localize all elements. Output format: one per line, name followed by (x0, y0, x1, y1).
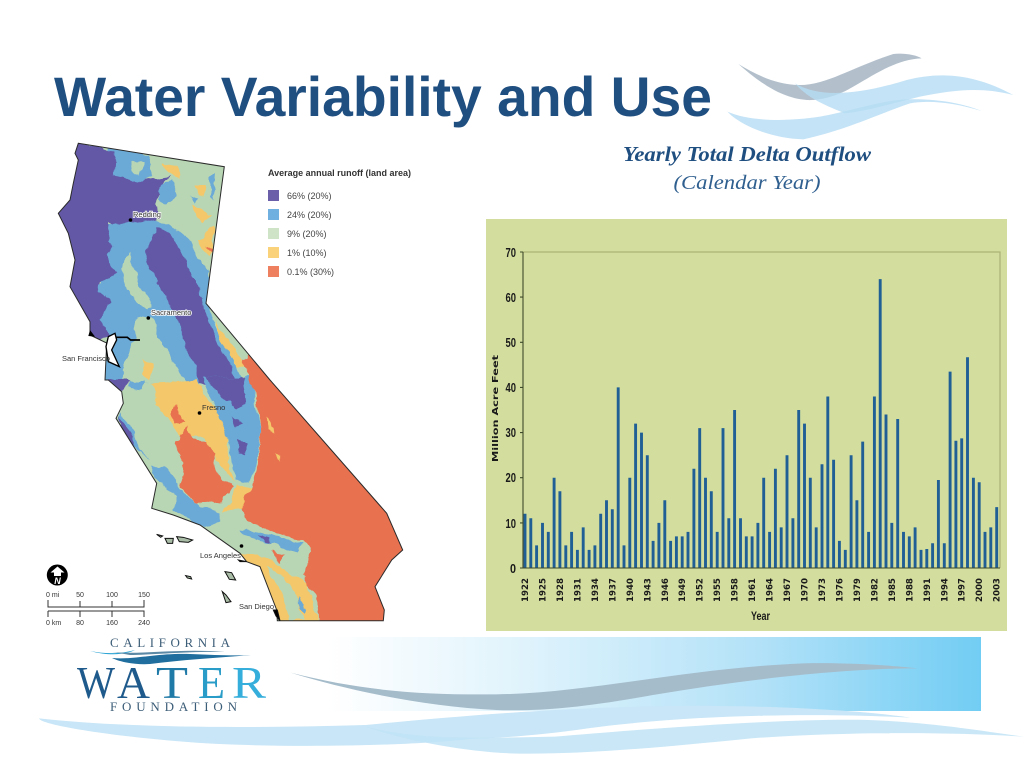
logo waves (90, 650, 251, 664)
x axis year labels: 1973 (818, 578, 828, 602)
city: Sacramento (146, 308, 191, 320)
legend item: 0.1%: 0.1% (30%) (287, 267, 334, 277)
y axis labels: 40 (506, 380, 516, 395)
valley yellow (152, 380, 235, 483)
icon: north arrow (47, 564, 68, 586)
legend item: 24% (268, 209, 332, 220)
x axis year labels: 1931 (573, 578, 583, 602)
x axis year labels: 1979 (853, 578, 863, 602)
y axis labels: 10 (506, 516, 516, 531)
map: California average annual runoff (58, 142, 404, 622)
logo wordmark bottom: FOUNDATION (110, 699, 238, 714)
x axis title: Year (751, 609, 770, 623)
x axis year labels: 1991 (923, 578, 933, 602)
city: San Diego: San Diego (239, 602, 274, 611)
x axis year labels: 1961 (748, 578, 758, 602)
legend item: 0.1% (268, 266, 334, 277)
south coast purple and blue (103, 380, 128, 390)
city: Redding (129, 210, 161, 222)
y axis title: Million Acre Feet (491, 355, 500, 462)
eastern strip (217, 322, 247, 367)
city: Sacramento: Sacramento (151, 308, 191, 317)
x axis year labels: 1952 (696, 578, 706, 602)
city: Los Angeles: Los Angeles (200, 551, 241, 560)
legend item: 1% (268, 247, 327, 258)
x axis year labels: 1982 (870, 578, 880, 602)
desert red (240, 355, 410, 623)
scale bar (46, 592, 150, 627)
x axis year labels: 1970 (800, 578, 810, 602)
panel: bar chart of yearly delta outflow (486, 219, 1007, 631)
city: Redding: Redding (133, 210, 161, 219)
chart heading: Yearly Total Delta Outflow (623, 142, 872, 166)
scale bar: 0 km (46, 620, 61, 627)
San Francisco Bay (88, 330, 140, 367)
y axis labels: 0 (510, 561, 516, 576)
legend title: Average annual runoff (land area) (268, 168, 411, 178)
x axis year labels: 2000 (975, 578, 985, 602)
y axis labels: 20 (506, 470, 516, 485)
x axis year labels: 1967 (783, 578, 793, 602)
scale bar: 150 (138, 592, 150, 599)
y axis labels: 60 (506, 290, 516, 305)
southern California (240, 530, 303, 554)
x axis year labels: 1964 (766, 578, 776, 602)
axes (520, 252, 1000, 568)
bars (525, 279, 997, 568)
x axis year labels: 1925 (538, 578, 548, 602)
x axis year labels: 1946 (661, 578, 671, 602)
state outline (58, 143, 403, 621)
legend item: 66%: 66% (20%) (287, 191, 332, 201)
chart heading (623, 142, 872, 194)
plot frame (523, 252, 1000, 568)
y axis labels: 50 (506, 335, 516, 350)
title: Water Variability and Use (54, 65, 712, 128)
x axis year labels: 1943 (643, 578, 653, 602)
x axis year labels: 1994 (940, 578, 950, 602)
scale bar: 240 (138, 620, 150, 627)
x axis year labels (521, 578, 1003, 602)
scale bar: 160 (106, 620, 118, 627)
logo wordmark WATER: E (198, 657, 225, 708)
legend item: 66% (268, 190, 332, 201)
logo wordmark WATER (77, 657, 266, 708)
city: Los Angeles (200, 544, 243, 560)
x axis year labels: 1928 (556, 578, 566, 602)
x axis year labels: 1922 (521, 578, 531, 602)
valley green (123, 252, 152, 310)
x axis year labels: 1934 (591, 578, 601, 602)
logo wordmark WATER: R (232, 657, 266, 708)
city: Fresno (198, 403, 225, 415)
icon: north arrow: N (54, 576, 61, 586)
x axis year labels: 1940 (626, 578, 636, 602)
city: San Francisco: San Francisco (62, 354, 110, 363)
legend item: 1%: 1% (10%) (287, 248, 327, 258)
logo wordmark WATER: T (156, 657, 188, 708)
x axis year labels: 1985 (888, 578, 898, 602)
Channel Islands and San Diego coast (157, 534, 280, 621)
x axis year labels: 1997 (958, 578, 968, 602)
Sierra purple (147, 227, 232, 383)
lower yellow (223, 487, 253, 512)
y axis labels: 30 (506, 425, 516, 440)
x axis year labels: 1976 (835, 578, 845, 602)
northwest purple (58, 144, 171, 340)
central coast blue (150, 467, 222, 527)
map legend (268, 168, 411, 277)
x axis year labels: 1955 (713, 578, 723, 602)
north blue zones (107, 148, 152, 182)
valley red (173, 427, 233, 503)
Sierra south (203, 377, 261, 483)
x axis year labels: 1988 (905, 578, 915, 602)
x axis year labels: 1949 (678, 578, 688, 602)
legend item: 9% (268, 228, 327, 239)
logo wordmark top: CALIFORNIA (110, 635, 231, 650)
legend item: 24%: 24% (20%) (287, 210, 332, 220)
footer gradient band and waves (39, 637, 1024, 754)
scale bar: 100 (106, 592, 118, 599)
city: Fresno: Fresno (202, 403, 225, 412)
y axis labels: 70 (506, 245, 516, 260)
y axis labels (506, 245, 516, 576)
northeast yellow and red (162, 162, 215, 257)
x axis year labels: 1958 (731, 578, 741, 602)
scale bar: 50 (76, 592, 84, 599)
legend item: 9%: 9% (20%) (287, 229, 327, 239)
x axis year labels: 1937 (608, 578, 618, 602)
logo: California Water Foundation (77, 635, 266, 714)
scale bar: 80 (76, 620, 84, 627)
logo wordmark WATER: A (117, 657, 150, 708)
logo wordmark WATER: W (77, 657, 116, 708)
decorative header waves (727, 54, 1013, 139)
chart heading: (Calendar Year) (674, 172, 821, 194)
scale bar: 0 mi (46, 592, 60, 599)
x axis year labels: 2003 (993, 578, 1003, 602)
